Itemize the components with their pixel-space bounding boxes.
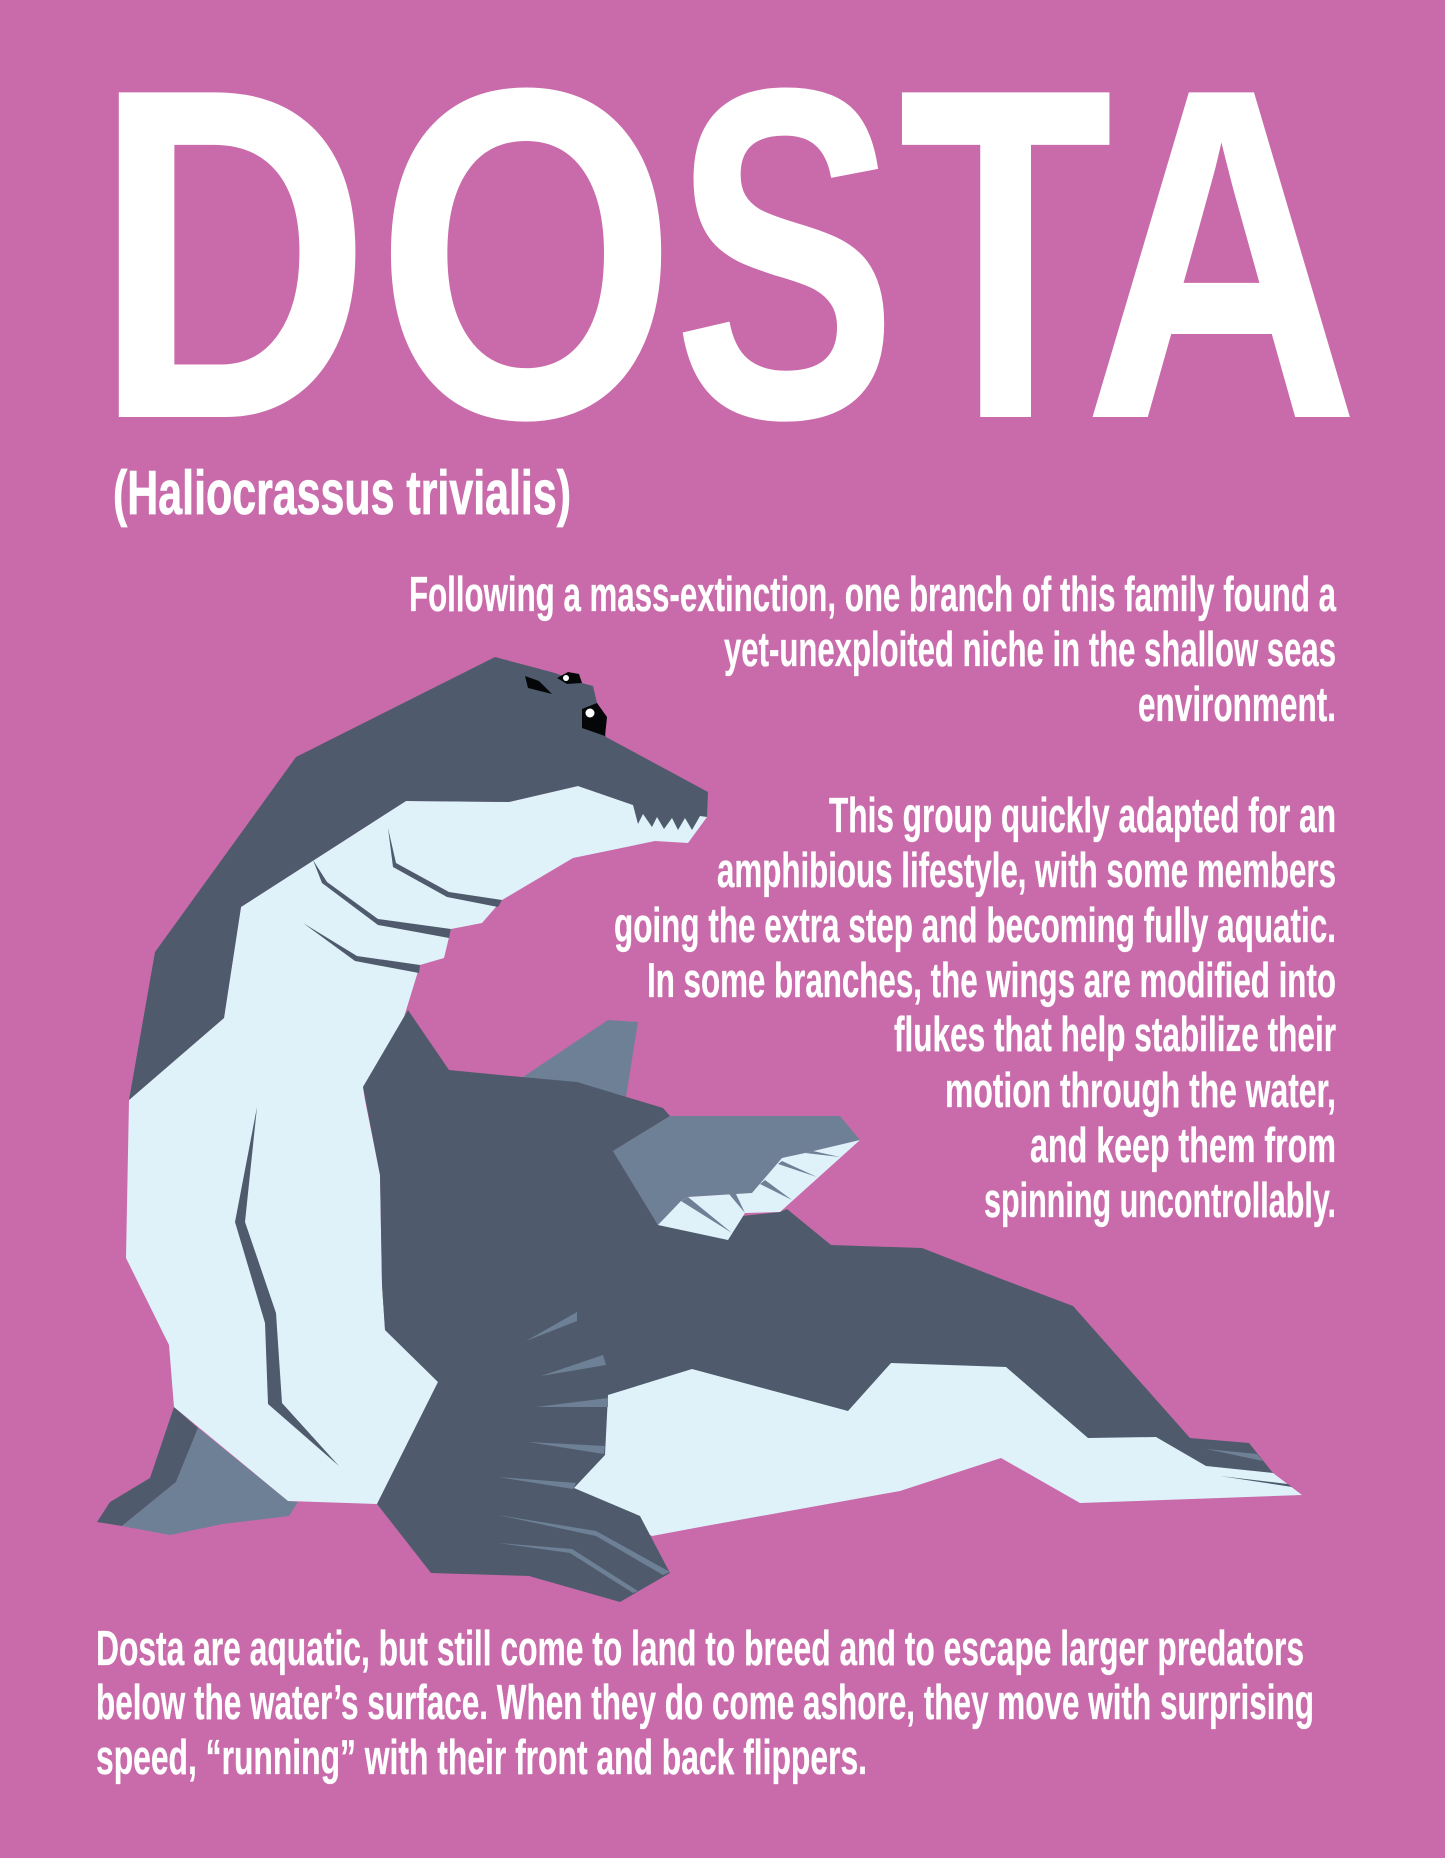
rear flipper	[97, 1407, 298, 1535]
dark main body and front flipper	[363, 1010, 1273, 1602]
wing fluke	[613, 1116, 860, 1240]
arm crease	[235, 1107, 339, 1466]
text block: mass extinction	[409, 568, 1336, 732]
fur marks	[498, 1312, 1263, 1593]
nostril marking	[525, 676, 552, 694]
text block: mass extinction: environment.	[1138, 678, 1336, 732]
text block: coming ashore: speed, “running” with their front and back flippers.	[96, 1731, 867, 1785]
light belly rear	[570, 1350, 1302, 1536]
neck creases	[303, 828, 502, 973]
dorsal fin	[523, 1020, 638, 1100]
illustration: dosta animal	[97, 657, 1302, 1602]
text block: coming ashore	[96, 1622, 1314, 1785]
title	[93, 0, 1360, 518]
text block: amphibious adaptation	[614, 789, 1336, 1228]
title: A	[1083, 0, 1360, 518]
dark head and back	[129, 657, 708, 1100]
title: D	[93, 0, 372, 518]
title: O	[375, 0, 678, 517]
subtitle: scientific name: (Haliocrassus trivialis)	[113, 459, 571, 528]
title: T	[898, 0, 1113, 518]
light chest and throat	[126, 786, 707, 1504]
title: S	[673, 0, 897, 517]
far eye	[557, 672, 582, 684]
near eye	[582, 703, 607, 736]
tail crease	[1220, 1476, 1292, 1487]
